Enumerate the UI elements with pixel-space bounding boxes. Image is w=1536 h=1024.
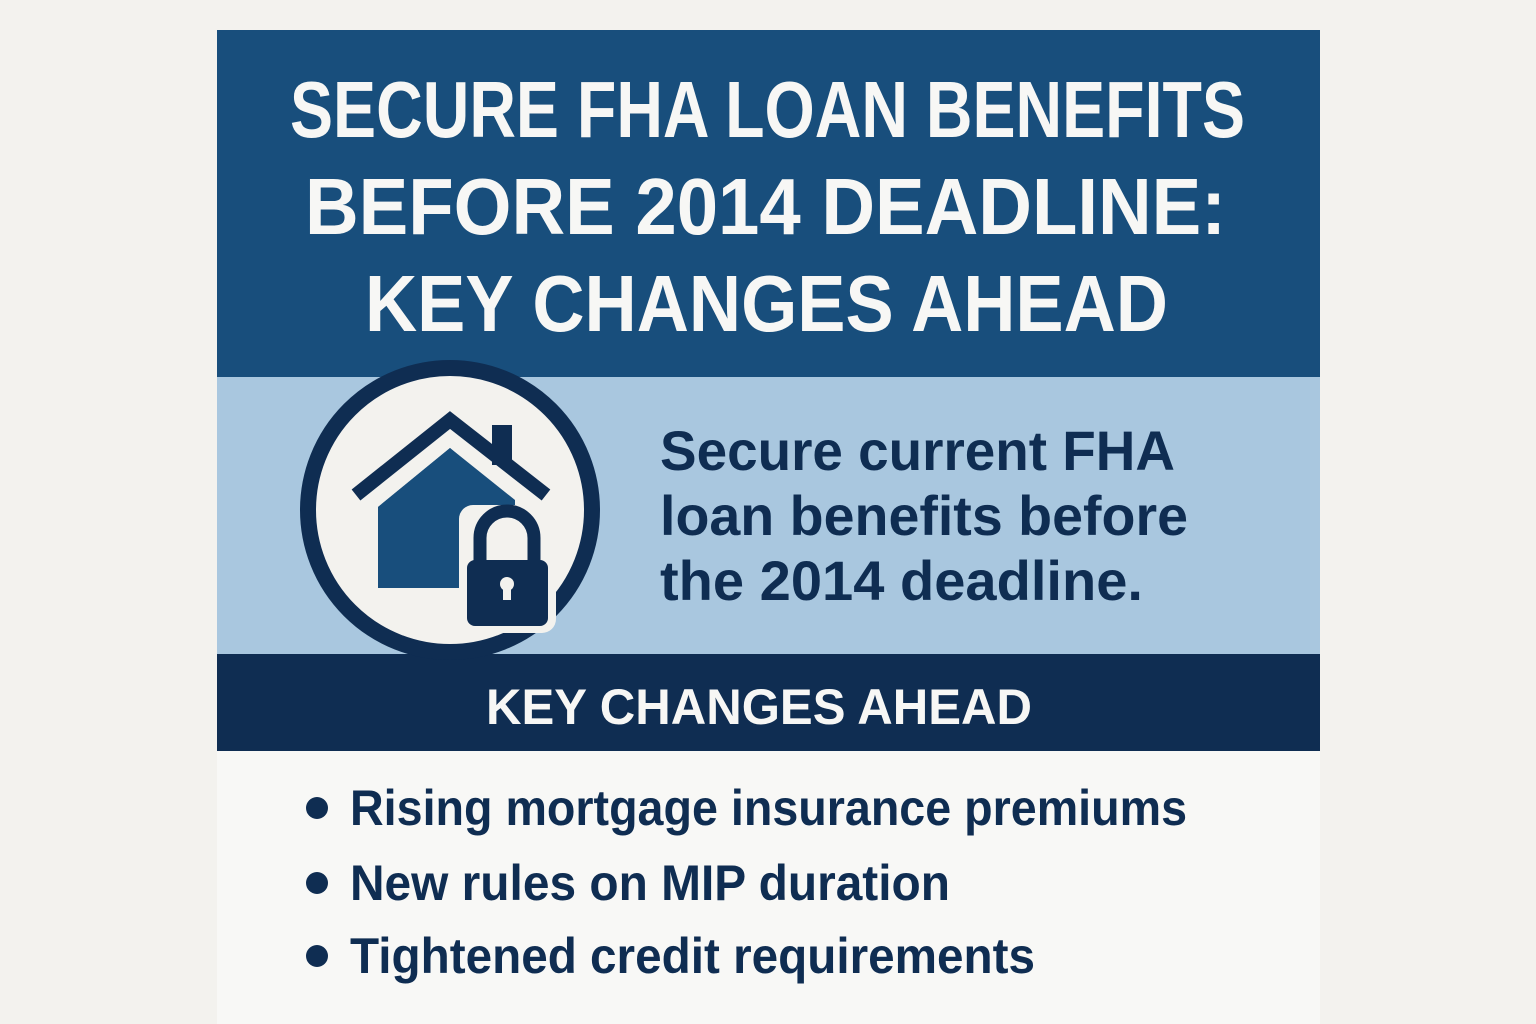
text block: intro: Secure current FHA <box>660 419 1175 482</box>
panel: key changes header <box>217 654 1320 751</box>
panel: intro band <box>217 377 1320 654</box>
title: BEFORE 2014 DEADLINE: <box>305 162 1226 251</box>
list: key changes <box>306 780 1187 984</box>
bullet 3: Tightened credit requirements <box>350 928 1035 984</box>
heading: key changes: KEY CHANGES AHEAD <box>486 679 1032 735</box>
title: KEY CHANGES AHEAD <box>365 259 1168 348</box>
panel: title band <box>217 30 1320 377</box>
panel: white list area <box>217 751 1320 1024</box>
text block: intro: loan benefits before <box>660 484 1188 547</box>
bullet 2: New rules on MIP duration <box>350 855 950 911</box>
text block: intro <box>660 419 1188 612</box>
text block: intro: the 2014 deadline. <box>660 549 1143 612</box>
bullet 1: Rising mortgage insurance premiums <box>350 780 1187 836</box>
title: SECURE FHA LOAN BENEFITS <box>290 65 1245 154</box>
title <box>290 65 1245 348</box>
icon: house with lock <box>308 368 592 652</box>
